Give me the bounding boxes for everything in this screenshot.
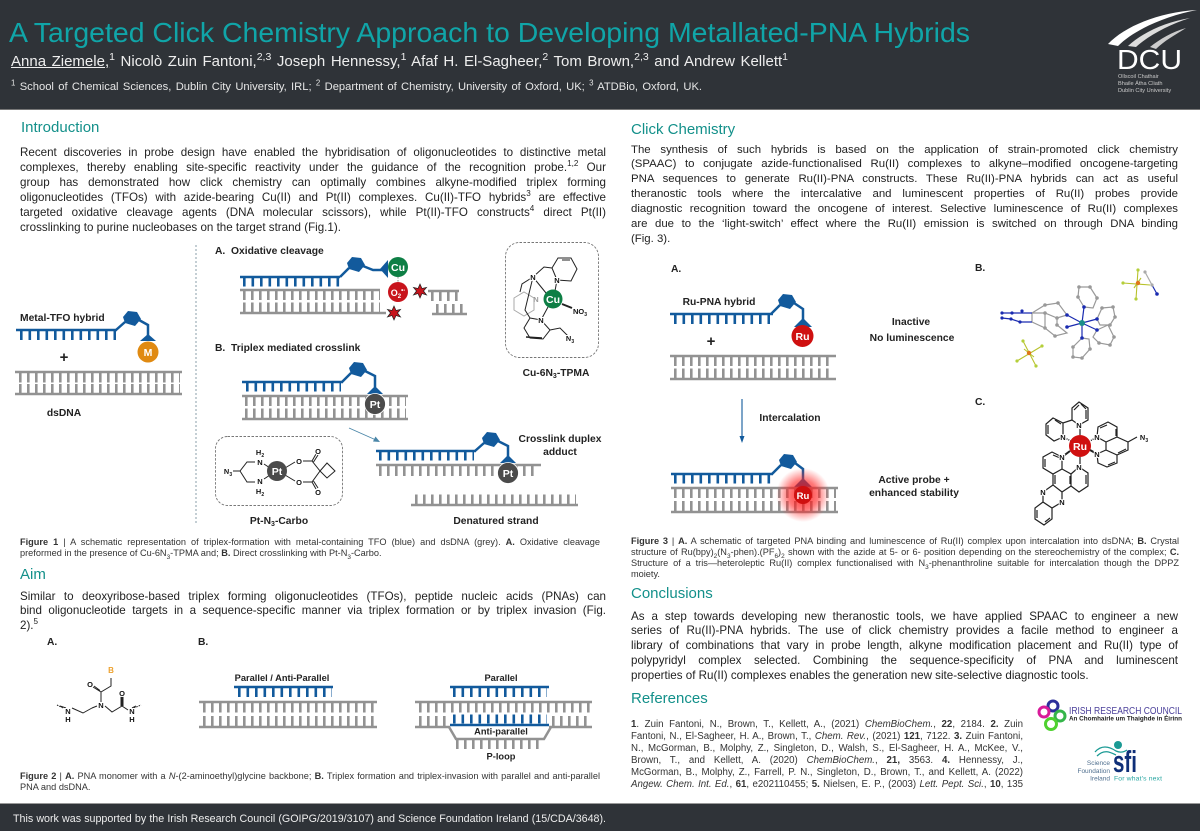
DCU logo: Ollscoil Chathair	[1118, 74, 1159, 80]
DCU logo	[1108, 10, 1197, 94]
B triplex mediated crosslink: Pt	[370, 399, 381, 411]
click chemistry text: PNA sequences to generate Ru(II)-PNA constructs. These Ru(II)-PNA hybrids can act as useful	[631, 173, 1178, 185]
Pt-N3-Carbo structure: 3	[229, 472, 232, 478]
A Ru-PNA hybrid: Ru	[796, 331, 810, 343]
C Ru complex structure: N	[1094, 433, 1100, 442]
introduction text: complexes, thereby enabling site-specific reactivity under the guidance of the recognition probe.1,2 Our	[20, 159, 606, 174]
Pt-N3-Carbo structure: Pt	[272, 466, 283, 478]
figure 2 schematics	[47, 637, 592, 762]
reference list: N., McGorman, B., Molphy, Z., Singleton, D., Walsh, S., El-Sagheer, H. A., McKee, V.,	[631, 743, 1023, 754]
click chemistry text: are due to the ‘light-switch’ effect where the Ru(II) emission is switched on through DNA binding	[631, 218, 1178, 230]
B triplex mediated crosslink	[215, 343, 408, 419]
Cu-6N3-TPMA structure: NO	[573, 307, 584, 316]
Pt-N3-Carbo structure: H	[256, 448, 261, 457]
C Ru complex structure: C.	[975, 397, 985, 408]
A Ru-PNA hybrid: A.	[671, 264, 681, 275]
reference list: McGorman, B., Molphy, Z., Farrell, P. N., Singleton, D., Brown, T., and Kellett, A. (2022)	[631, 767, 1023, 778]
heading: introduction: Introduction	[21, 119, 99, 136]
acknowledgement text: This work was supported by the Irish Research Council (GOIPG/2019/3107) and Science Foundation Ireland (15/CDA/3648).	[13, 813, 606, 825]
logo: Science Foundation Ireland: Science	[1087, 760, 1110, 767]
panel: references	[630, 690, 1023, 790]
header band	[0, 0, 1200, 110]
aim text	[20, 590, 606, 632]
figure 2 caption	[20, 770, 600, 792]
aim text: Similar to deoxyribose-based triplex forming oligonucleotides (TFOs), peptide nucleic acids (PNAs) can	[20, 590, 606, 602]
logo: Science Foundation Ireland: Foundation	[1077, 768, 1110, 775]
logo: Science Foundation Ireland	[1077, 741, 1162, 782]
A oxidative cleavage	[215, 246, 467, 320]
A PNA monomer: N	[129, 707, 135, 716]
figure 1 caption: Figure 1 | A schematic representation of triplex-formation with metal-containing TFO (blue) and dsDNA (grey). A. Oxidative cleavage	[20, 536, 600, 546]
logo: Irish Research Council: An Chomhairle um Thaighde in Éirinn	[1069, 714, 1182, 722]
logo: Science Foundation Ireland: For what's next	[1114, 776, 1162, 782]
metal-TFO hybrid group: Metal-TFO hybrid	[20, 313, 105, 324]
intercalation arrow: Intercalation	[759, 413, 821, 424]
conclusions text: library of combinations that vary in probe length, alkyne modification placement and Ru(II) type of	[631, 639, 1178, 652]
B triplex mediated crosslink: B. Triplex mediated crosslink	[215, 343, 361, 354]
figure 2 caption: PNA and dsDNA.	[20, 782, 90, 792]
Cu-6N3-TPMA structure: 3	[584, 312, 587, 318]
figure 1 caption	[20, 536, 600, 560]
A PNA monomer: B	[108, 666, 114, 675]
B triplex invasion with P-loop	[415, 673, 592, 762]
introduction text: Recent discoveries in probe design have enabled the hybridisation of oligonucleotides to distinctive metal	[20, 146, 606, 158]
figure 2 caption: Figure 2 | A. PNA monomer with a N-(2-aminoethyl)glycine backbone; B. Triplex formation and triplex-invasion with parallel and anti-parallel	[20, 770, 600, 780]
logo: Irish Research Council: IRISH RESEARCH COUNCIL	[1069, 706, 1182, 717]
aim text: 2).5	[20, 617, 38, 632]
panel: introduction	[20, 119, 606, 234]
reference list	[630, 719, 1023, 790]
conclusions text: series of Ru(II)-PNA hybrids. The use of click chemistry provides a facile method to engineer a	[631, 624, 1178, 637]
A oxidative cleavage: 2	[398, 294, 402, 300]
Cu-6N3-TPMA structure: N	[538, 316, 544, 325]
funder logos	[1038, 700, 1182, 782]
crosslink duplex adduct: Pt	[503, 468, 514, 480]
Pt-N3-Carbo structure: O	[296, 457, 302, 466]
B crystal structure	[975, 263, 1159, 368]
Cu-6N3-TPMA structure: -TPMA	[557, 368, 590, 379]
C Ru complex structure: N	[1076, 421, 1082, 430]
introduction text: crosslinking to purine nucleobases on the target strand (Fig.1).	[20, 220, 341, 234]
A PNA monomer: N	[98, 701, 104, 710]
B parallel / anti-parallel triplex	[198, 637, 377, 727]
logo: Science Foundation Ireland: sfi	[1113, 744, 1137, 779]
Pt-N3-Carbo structure: O	[296, 478, 302, 487]
Cu-6N3-TPMA structure	[506, 242, 598, 380]
Cu-6N3-TPMA structure: N	[566, 334, 571, 343]
Cu-6N3-TPMA structure: N	[533, 295, 539, 304]
A Ru-PNA hybrid	[670, 264, 836, 379]
A PNA monomer: H	[65, 715, 71, 724]
Pt-N3-Carbo structure: 2	[261, 453, 264, 459]
click chemistry text: (SPAAC) to conjugate azide-functionalised Ru(II) complexes to alkyne–modified oncogene-targeting	[631, 158, 1178, 170]
A oxidative cleavage: A. Oxidative cleavage	[215, 246, 324, 257]
panel: click chemistry	[631, 121, 1178, 245]
figure 3 caption: moiety.	[631, 568, 660, 578]
click chemistry text: The synthesis of such hybrids is based on the application of strain-promoted click chemistry	[631, 144, 1178, 156]
A PNA monomer: O	[87, 680, 93, 689]
panel: conclusions	[631, 585, 1178, 682]
A Ru-PNA hybrid: Ru-PNA hybrid	[683, 297, 755, 308]
conclusions text	[631, 610, 1178, 682]
reference list: Brown, T., and Kellett, A. (2020) ChemBioChem., 21, 3563. 4. Hennessy, J.,	[631, 755, 1023, 766]
intercalation arrow	[740, 399, 821, 443]
crosslink duplex adduct: Crosslink duplex	[519, 434, 602, 445]
figure 1 schematic	[15, 242, 602, 528]
click chemistry text: theranostic tools where the intercalative and luminescent properties of Ru(II) probes provide	[631, 188, 1178, 200]
C Ru complex structure: N	[1076, 463, 1082, 472]
reference list: 1. Zuin Fantoni, N., Brown, T., Kellett, A., (2021) ChemBioChem., 22, 2184. 2. Zuin	[631, 719, 1023, 730]
title: A Targeted Click Chemistry Approach to Developing Metallated-PNA Hybrids	[9, 17, 970, 48]
A PNA monomer: O	[119, 689, 125, 698]
crosslink duplex adduct	[376, 432, 602, 484]
DCU logo: DCU	[1117, 44, 1182, 75]
crosslink duplex adduct: adduct	[543, 447, 577, 458]
Pt-N3-Carbo structure: N	[224, 467, 229, 476]
Pt-N3-Carbo structure: Pt-N	[250, 516, 271, 527]
Cu-6N3-TPMA structure: Cu	[546, 294, 560, 306]
affiliations: 1 School of Chemical Sciences, Dublin City University, IRL; 2 Department of Chemistry, University of Oxford, UK; 3 ATDBio, Oxford, UK.	[11, 78, 702, 93]
metal-TFO hybrid group	[15, 311, 182, 419]
Cu-6N3-TPMA structure: 3	[571, 339, 574, 345]
heading: references: References	[631, 690, 708, 707]
B crystal structure: B.	[975, 263, 985, 274]
B triplex invasion with P-loop: P-loop	[487, 752, 516, 762]
Cu-6N3-TPMA structure: N	[530, 273, 536, 282]
conclusions text: As a step towards developing new theranostic tools, we have applied SPAAC to engineer a new	[631, 610, 1178, 622]
conclusions text: polypyridyl complex selected. Combining the sequence-specificity of PNA and luminescent	[631, 654, 1178, 667]
B parallel / anti-parallel triplex: B.	[198, 637, 208, 648]
figure 3 schematics	[670, 263, 1159, 526]
Pt-N3-Carbo structure: O	[315, 488, 321, 497]
Pt-N3-Carbo structure	[216, 436, 342, 528]
Pt-N3-Carbo structure: N	[257, 477, 263, 486]
A oxidative cleavage: •-	[401, 288, 405, 294]
C Ru complex structure: N	[1040, 488, 1046, 497]
Cu-6N3-TPMA structure: Cu-6N	[523, 368, 553, 379]
C Ru complex structure: N	[1059, 498, 1065, 507]
C Ru complex structure	[975, 397, 1148, 525]
figure 3 caption: Structure of a tris—heteroleptic Ru(II) complex functionalised with N3-phenanthroline suitable for intercalation though the DPPZ	[631, 558, 1179, 570]
introduction text	[20, 146, 606, 234]
logo: Irish Research Council	[1039, 701, 1182, 730]
inactive label: Inactive	[892, 317, 930, 328]
A oxidative cleavage: Cu	[391, 262, 405, 274]
introduction text: oligonucleotides (TFOs) with azide-bearing Cu(II) and Pt(II) complexes. Cu(II)-TFO hybrids3 are effective	[20, 189, 606, 204]
B parallel / anti-parallel triplex: Parallel / Anti-Parallel	[235, 673, 329, 683]
DCU logo: Bhaile Átha Cliath	[1118, 80, 1162, 87]
C Ru complex structure: N	[1059, 453, 1065, 462]
active probe label: Active probe +	[878, 475, 950, 486]
C Ru complex structure: N	[1094, 450, 1100, 459]
Pt-N3-Carbo structure: 2	[261, 492, 264, 498]
C Ru complex structure: Ru	[1073, 441, 1087, 453]
figure 3 caption	[631, 536, 1179, 579]
conclusions text: properties of Ru(II) complexes enables the generation new site-selective diagnostic tools.	[631, 669, 1089, 682]
aim text: bind oligonucleotide targets in a sequence-specific manner via triplex formation or by triplex invasion (Fig.	[20, 604, 606, 617]
panel: aim	[20, 566, 606, 632]
A PNA monomer: N	[65, 707, 71, 716]
figure 3 caption: Figure 3 | A. A schematic of targeted PNA binding and luminescence of Ru(II) complex upon intercalation into dsDNA; B. Crystal	[631, 536, 1179, 546]
metal-TFO hybrid group: dsDNA	[47, 408, 82, 419]
logo: Science Foundation Ireland: Ireland	[1090, 776, 1110, 782]
metal-TFO hybrid group: M	[144, 347, 153, 359]
reference list: Angew. Chem. Int. Ed., 61, e202110455; 5. Nielsen, E. P., (2003) Lett. Pept. Sci., 10, 135	[631, 779, 1023, 790]
active probe with glow	[671, 454, 838, 522]
panel: figure 1	[15, 242, 602, 560]
arrow to duplex adduct	[349, 428, 380, 442]
reference list: Fantoni, N., El-Sagheer, H. A., Brown, T., Chem. Rev., (2021) 121, 7122. 3. Zuin Fantoni,	[631, 731, 1023, 742]
A Ru-PNA hybrid: +	[707, 333, 716, 350]
A PNA monomer	[47, 637, 141, 724]
heading: conclusions: Conclusions	[631, 585, 713, 602]
panel: figure 3	[631, 263, 1179, 579]
click chemistry text	[631, 144, 1178, 245]
heading: click chemistry: Click Chemistry	[631, 121, 735, 138]
Cu-6N3-TPMA structure: 3	[553, 373, 557, 380]
active probe with glow: Ru	[797, 491, 810, 502]
C Ru complex structure: 3	[1145, 438, 1148, 444]
panel: figure 2	[20, 637, 600, 792]
Pt-N3-Carbo structure: 3	[271, 521, 275, 528]
C Ru complex structure: N	[1060, 433, 1066, 442]
heading: aim: Aim	[20, 566, 46, 583]
authors: Anna Ziemele,1 Nicolò Zuin Fantoni,2,3 Joseph Hennessy,1 Afaf H. El-Sagheer,2 Tom Brown,2,3 and Andrew Kellett1	[11, 51, 788, 70]
Pt-N3-Carbo structure: -Carbo	[275, 516, 308, 527]
inactive label: No luminescence	[870, 333, 955, 344]
figure 3 caption: structure of Ru(bpy)2(N3-phen).(PF6)2 shown with the azide at 5- or 6- position depending on the stereochemistry of the complex; C.	[631, 546, 1179, 559]
active probe label: enhanced stability	[869, 488, 959, 499]
footer band	[0, 803, 1200, 831]
DCU logo: Dublin City University	[1118, 88, 1171, 94]
A PNA monomer: H	[129, 715, 135, 724]
Pt-N3-Carbo structure: O	[315, 447, 321, 456]
B triplex invasion with P-loop: Anti-parallel	[474, 726, 528, 736]
figure 1 caption: preformed in the presence of Cu-6N3-TPMA and; B. Direct crosslinking with Pt-N3-Carbo.	[20, 548, 382, 560]
C Ru complex structure: N	[1140, 433, 1145, 442]
A PNA monomer: A.	[47, 637, 57, 648]
click chemistry text: diagnostic recognition toward the oncogene of interest. Selective luminescence of Ru(II) complexes	[631, 203, 1178, 215]
introduction text: targeted oxidative cleavage agents (DNA molecular scissors), while Pt(II)-TFO constructs4 direct Pt(II)	[20, 204, 606, 218]
Cu-6N3-TPMA structure: N	[554, 276, 560, 285]
A oxidative cleavage: O	[391, 288, 398, 298]
metal-TFO hybrid group: +	[60, 349, 69, 366]
click chemistry text: (Fig. 3).	[631, 233, 670, 245]
Pt-N3-Carbo structure: N	[257, 458, 263, 467]
B triplex invasion with P-loop: Parallel	[484, 673, 518, 683]
Pt-N3-Carbo structure: H	[256, 487, 261, 496]
introduction text: group has demonstrated how click chemistry can optimally combines alkyne-modified triplex forming	[20, 176, 606, 188]
denatured strand: Denatured strand	[453, 516, 539, 527]
